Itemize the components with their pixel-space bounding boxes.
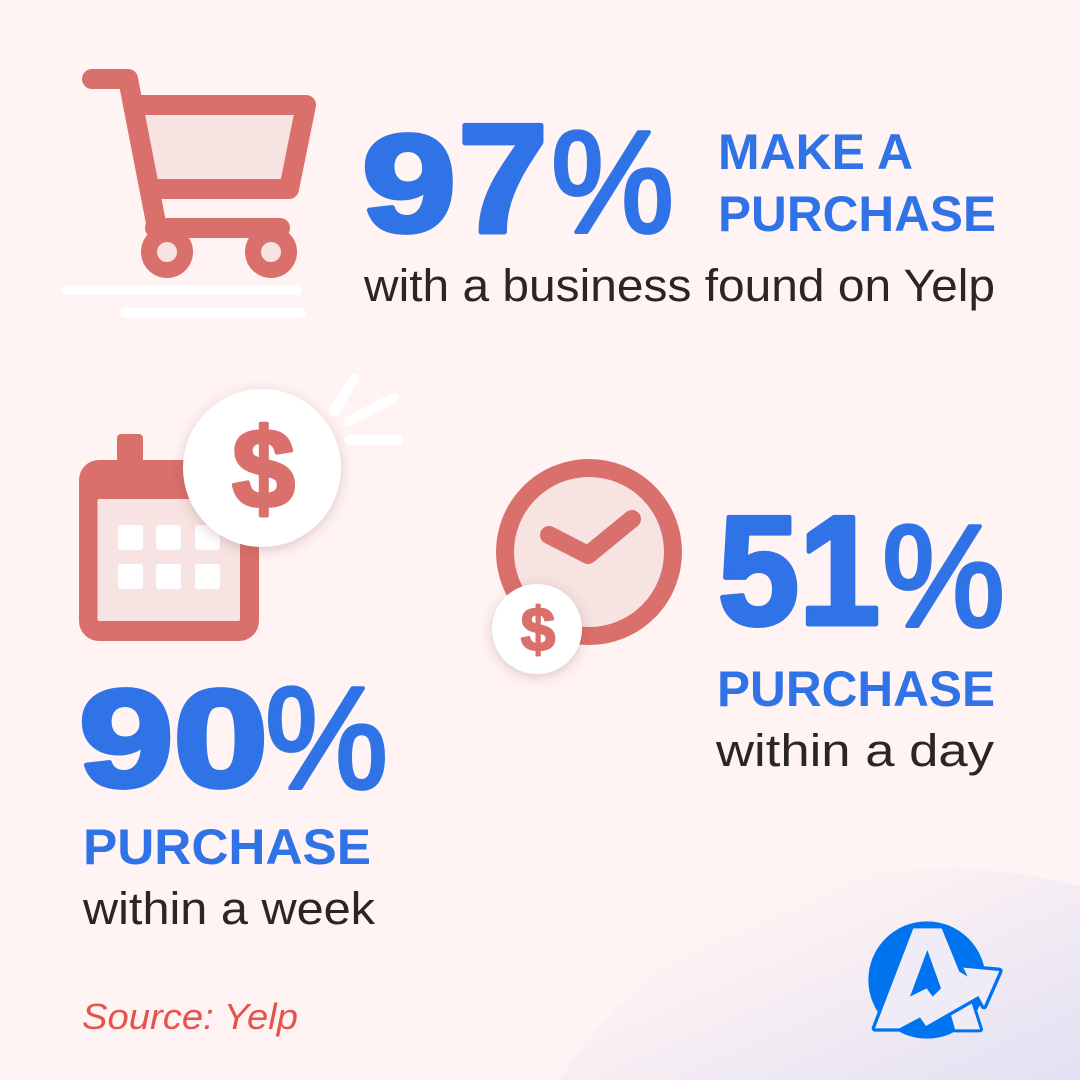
text: with a business found on Yelp: with a business found on Yelp: [363, 260, 995, 311]
stat: 97%: [362, 92, 674, 265]
source note: Source: Yelp: [82, 996, 298, 1037]
icon: clock with dollar coin: [492, 468, 673, 674]
heading: purchase: PURCHASE: [83, 819, 371, 875]
heading: make a purchase: PURCHASE: [718, 186, 996, 242]
stat: 97%: %: [551, 101, 674, 263]
stat: 90%: [79, 657, 388, 819]
heading: make a purchase: MAKE A: [718, 124, 913, 180]
decorative corner blob: [560, 868, 1080, 1080]
stat: 97%: 9: [362, 107, 456, 261]
stat: 51%: %: [882, 495, 1005, 657]
heading: purchase: PURCHASE: [717, 661, 995, 717]
text: within a week: within a week: [82, 883, 376, 934]
stat: 51%: [718, 484, 1005, 657]
icon: clock with dollar coin: $: [521, 596, 555, 665]
panel: 51% purchase within a day: [492, 468, 1005, 776]
logo: [868, 921, 999, 1039]
stat: 90%: 90: [79, 662, 268, 816]
stat: 97%: 7: [458, 92, 548, 265]
heading: make a purchase: [718, 124, 996, 242]
stat: 90%: %: [265, 657, 388, 819]
icon: calendar with dollar coin: $: [232, 406, 295, 531]
panel: 90% purchase within a week: [79, 379, 398, 934]
icon: calendar with dollar coin: [79, 379, 398, 641]
icon: shopping cart: [61, 79, 306, 318]
stat: 51%: 51: [718, 484, 880, 657]
panel: 97% make a purchase: [61, 79, 996, 318]
text: within a day: within a day: [715, 725, 995, 776]
